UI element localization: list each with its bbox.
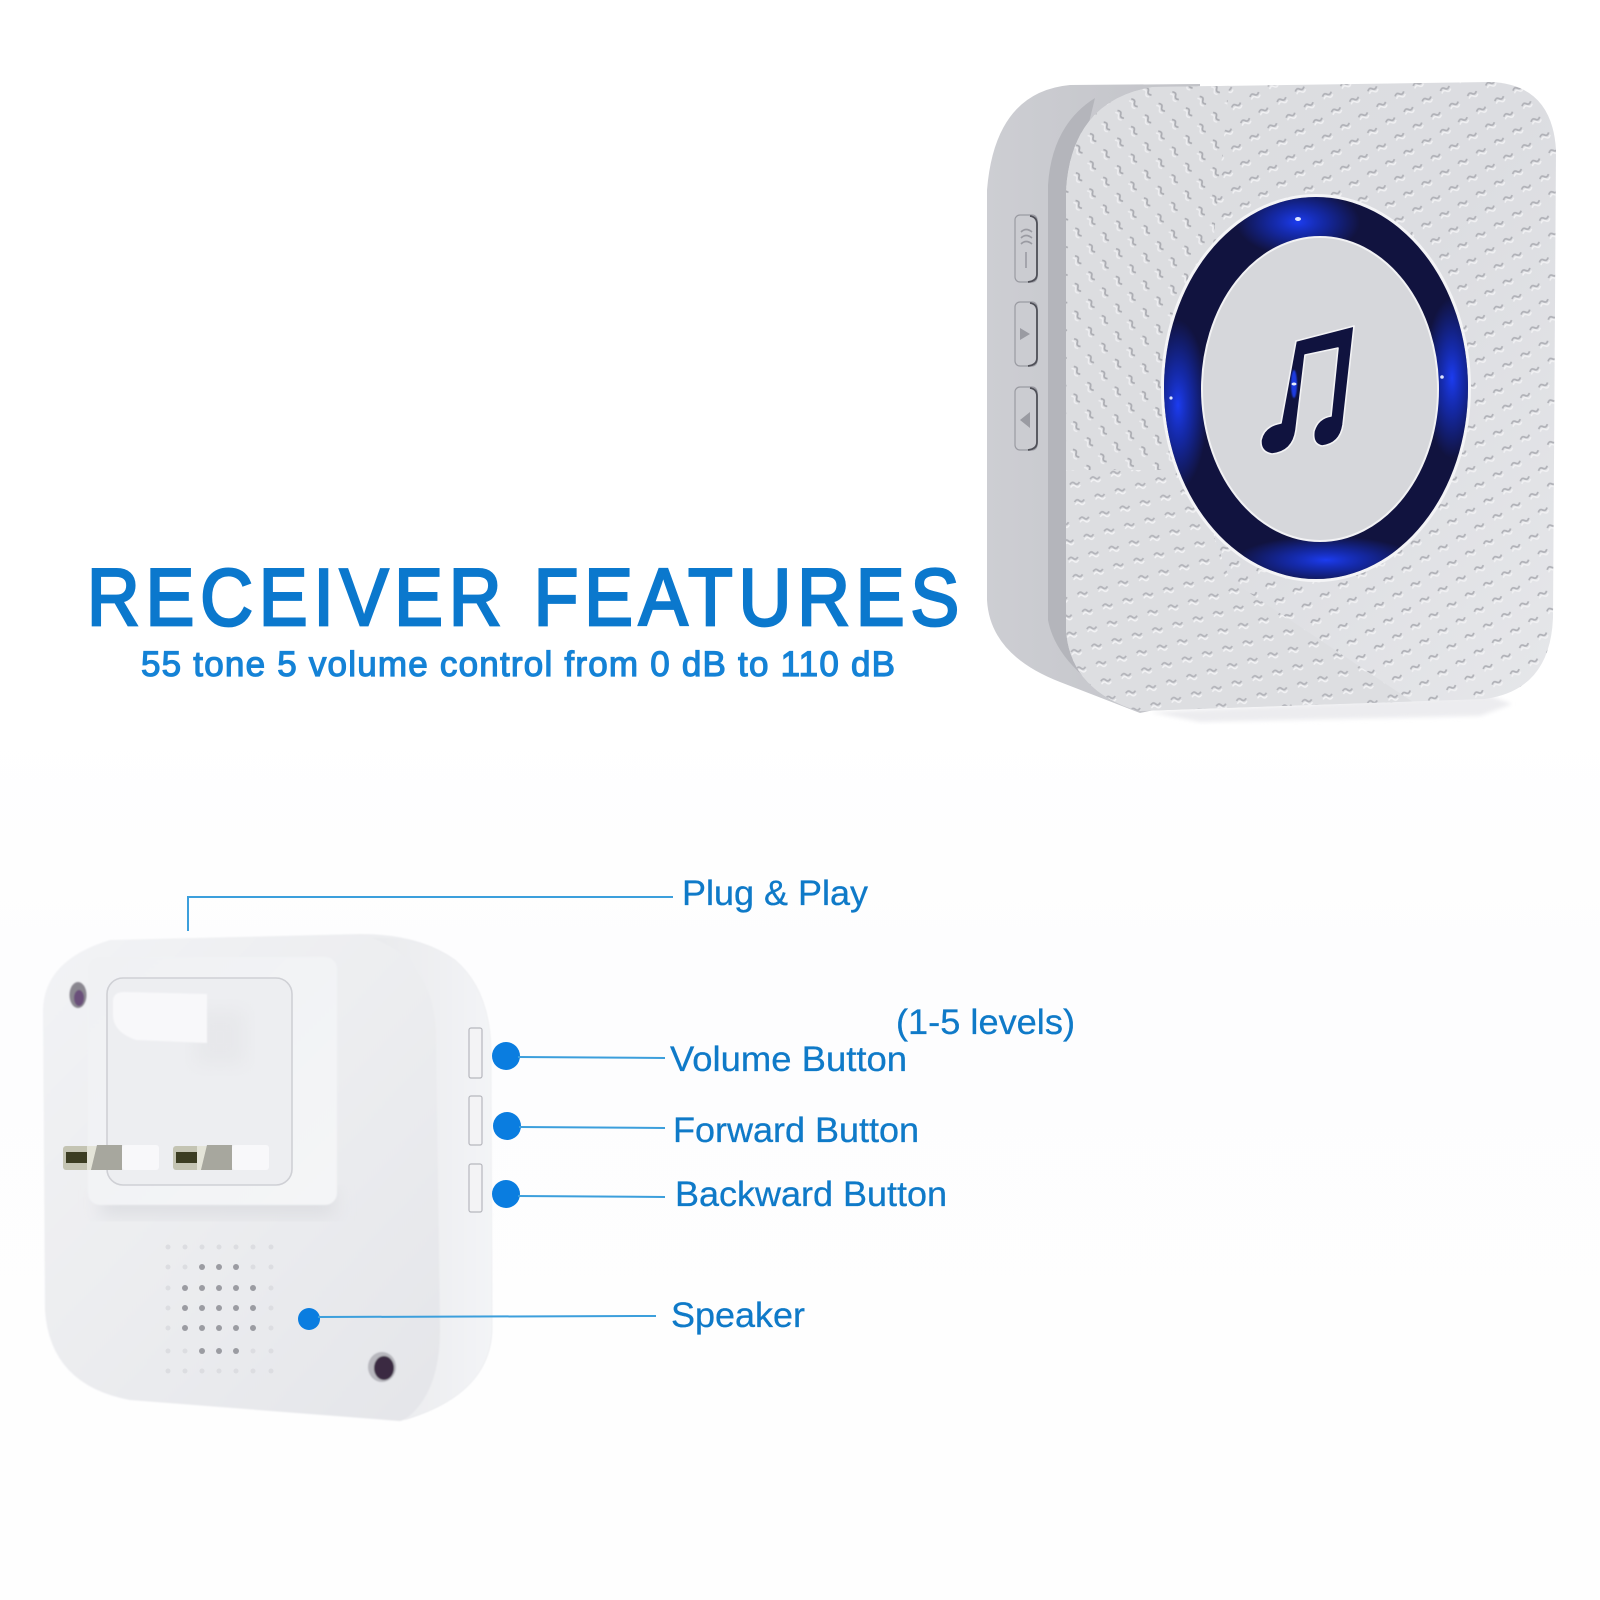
music note icon [1261,326,1354,454]
earth pin [113,992,207,1043]
callout: forward button [493,1111,919,1150]
side button: backward [1015,387,1037,450]
mounting hole bottom [368,1352,396,1382]
subtitle: 55 tone 5 volume control from 0 dB to 110 dB [141,645,895,684]
device textured face [1060,78,1560,720]
title: RECEIVER FEATURES [87,552,959,643]
back body silhouette [43,934,492,1421]
plug plate shadow [100,1190,335,1216]
right pin [173,1145,269,1170]
plug inner square [107,978,292,1185]
back side panel [372,938,492,1420]
callout: backward button [492,1175,947,1214]
callout: forward button: Forward Button [673,1111,919,1150]
receiver back device [43,934,492,1421]
side buttons [469,1028,482,1212]
callout: speaker: Speaker [671,1296,805,1335]
LED highlights [1169,217,1444,400]
side bevel band [1048,98,1138,711]
mounting hole top [70,982,86,1008]
note: levels: (1-5 levels) [896,1003,1075,1042]
side button: forward [1015,302,1037,366]
earth pin shadow [195,1010,245,1065]
blue LED ring [1148,188,1480,584]
receiver front device [987,78,1560,722]
side button: volume [1015,215,1037,282]
callout: plug and play [188,874,869,931]
device side body [987,84,1200,713]
callout: speaker [298,1296,805,1335]
callout: plug and play: Plug & Play [682,874,869,913]
speaker holes [166,1244,274,1374]
device shadow [1150,696,1512,722]
callout: volume button: Volume Button [670,1040,907,1079]
plug plate [88,957,337,1205]
centre disc [1202,237,1438,541]
callout: volume button [492,1040,907,1079]
left pin [63,1145,159,1170]
callout: backward button: Backward Button [675,1175,947,1214]
